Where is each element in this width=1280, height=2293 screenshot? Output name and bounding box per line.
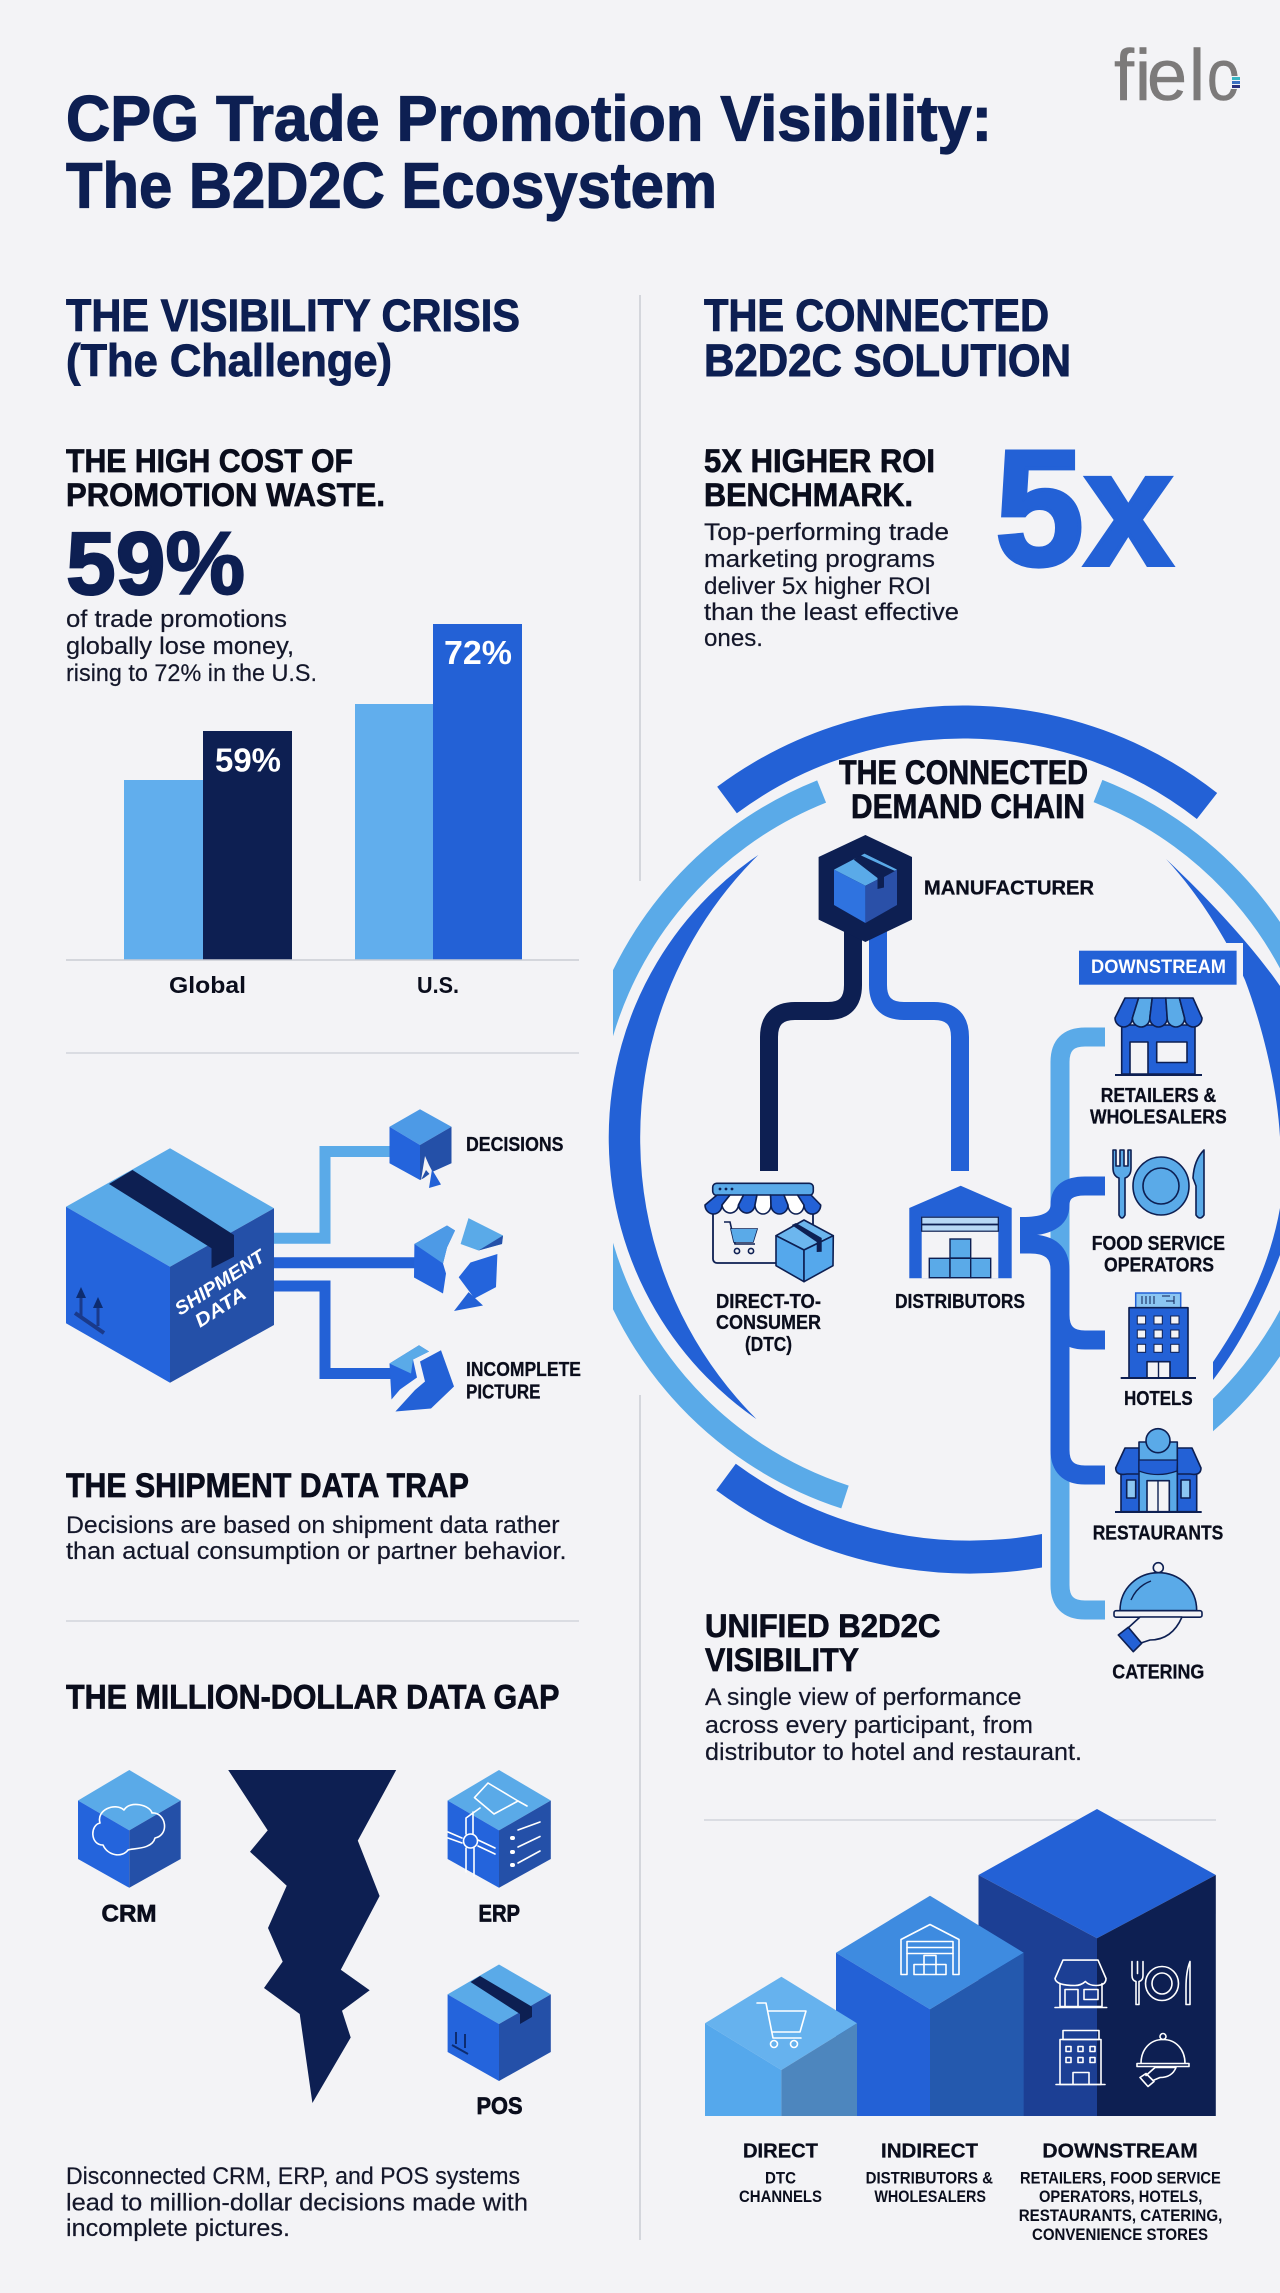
icon: direct-to-consumer store bbox=[705, 1183, 833, 1282]
label: indirect bbox=[866, 2140, 993, 2206]
description: ROI: Top-performing trade bbox=[704, 519, 949, 546]
panel: unified visibility bbox=[705, 1608, 1082, 1766]
icon: shipment box bbox=[66, 1148, 274, 1383]
icon: crack bbox=[228, 1770, 396, 2103]
heading: the connected solution bbox=[704, 290, 1071, 386]
description: ROI: marketing programs bbox=[704, 546, 935, 573]
stat description: rising to 72% in the U.S. bbox=[66, 660, 317, 687]
icon: catering cloche bbox=[1114, 1563, 1202, 1652]
label: direct: CHANNELS bbox=[739, 2188, 822, 2206]
label: incomplete picture: PICTURE bbox=[466, 1380, 540, 1403]
chart: stepped channels bbox=[705, 1809, 1222, 2244]
heading: shipment data trap: THE SHIPMENT DATA TRAP bbox=[66, 1467, 469, 1505]
big stat 59%: 59% bbox=[66, 513, 245, 613]
description: unified visibility: A single view of performance bbox=[705, 1684, 1022, 1711]
icon: ERP cube bbox=[448, 1770, 551, 1888]
description: ROI: ones. bbox=[704, 625, 763, 652]
label: indirect: DISTRIBUTORS & bbox=[866, 2169, 993, 2187]
label: manufacturer: MANUFACTURER bbox=[924, 876, 1094, 900]
heading: promotion waste bbox=[66, 443, 385, 513]
label: indirect: INDIRECT bbox=[881, 2140, 978, 2162]
step: downstream bbox=[978, 1809, 1216, 2116]
heading: ROI benchmark: BENCHMARK. bbox=[704, 477, 913, 513]
label: retailers and wholesalers: RETAILERS & bbox=[1101, 1084, 1216, 1107]
bar chart: Global bbox=[169, 972, 246, 998]
description: unified visibility: distributor to hotel and restaurant. bbox=[705, 1739, 1082, 1766]
connector: manufacturer to distributors bbox=[878, 930, 960, 1171]
label: hotels: HOTELS bbox=[1124, 1387, 1193, 1410]
panel: shipment data trap bbox=[66, 1109, 581, 1565]
heading: the connected solution: THE CONNECTED bbox=[704, 290, 1049, 341]
label: downstream bbox=[1019, 2140, 1222, 2244]
panel: million-dollar data gap bbox=[66, 1678, 560, 2242]
label: direct-to-consumer: DIRECT-TO- bbox=[716, 1290, 821, 1313]
bracket: downstream connectors bbox=[1020, 1037, 1105, 1610]
label: direct bbox=[739, 2140, 822, 2206]
description: data gap: lead to million-dollar decisions made with bbox=[66, 2190, 528, 2216]
heading: the connected solution: B2D2C SOLUTION bbox=[704, 335, 1071, 386]
label: downstream: RESTAURANTS, CATERING, bbox=[1019, 2207, 1222, 2225]
icon: shipment box: DATA bbox=[191, 1284, 251, 1332]
description: unified visibility: across every participant, from bbox=[705, 1712, 1033, 1739]
heading: promotion waste: THE HIGH COST OF bbox=[66, 443, 353, 479]
logo: fielo: fiel bbox=[1114, 36, 1205, 116]
heading: unified visibility: UNIFIED B2D2C bbox=[705, 1608, 940, 1644]
icon: restaurant bbox=[1115, 1429, 1202, 1512]
bar chart bbox=[66, 624, 579, 998]
icon: cracked cube bbox=[390, 1109, 452, 1188]
icon: CRM cube bbox=[78, 1770, 181, 1888]
connector: manufacturer to DTC bbox=[769, 930, 853, 1171]
heading: the visibility crisis: (The Challenge) bbox=[66, 335, 392, 386]
heading: data gap: THE MILLION-DOLLAR DATA GAP bbox=[66, 1678, 560, 1716]
label: ERP: ERP bbox=[478, 1900, 520, 1928]
icon: shattered cube bbox=[414, 1218, 503, 1311]
connector arrows bbox=[274, 1152, 418, 1374]
step: indirect bbox=[836, 1896, 1024, 2116]
logo: fielo: o bbox=[1207, 36, 1240, 116]
description: ROI: deliver 5x higher ROI bbox=[704, 573, 931, 600]
stat description: globally lose money, bbox=[66, 633, 294, 660]
label: downstream: CONVENIENCE STORES bbox=[1032, 2226, 1208, 2244]
heading: connected demand chain: DEMAND CHAIN bbox=[851, 788, 1085, 826]
label: incomplete picture: INCOMPLETE bbox=[466, 1358, 581, 1381]
panel: high cost of promotion waste bbox=[66, 443, 579, 998]
icon: retailers store bbox=[1115, 998, 1202, 1075]
badge: downstream bbox=[1074, 943, 1243, 990]
label: retailers and wholesalers: WHOLESALERS bbox=[1090, 1106, 1227, 1128]
stat description bbox=[66, 606, 317, 687]
title: The B2D2C Ecosystem bbox=[66, 150, 717, 222]
label: incomplete picture bbox=[466, 1358, 581, 1403]
badge: downstream: DOWNSTREAM bbox=[1091, 957, 1226, 978]
ring arcs bbox=[591, 722, 1280, 1557]
bar chart: 59% bbox=[215, 742, 281, 778]
title bbox=[66, 82, 992, 222]
label: direct-to-consumer: CONSUMER bbox=[716, 1311, 821, 1334]
label: indirect: WHOLESALERS bbox=[874, 2188, 986, 2206]
label: food service operators bbox=[1092, 1232, 1225, 1277]
label: food service operators: FOOD SERVICE bbox=[1092, 1232, 1225, 1255]
heading: ROI benchmark: 5X HIGHER ROI bbox=[704, 443, 935, 479]
heading: ROI benchmark bbox=[704, 443, 935, 513]
heading: unified visibility bbox=[705, 1608, 940, 1678]
label: catering: CATERING bbox=[1112, 1660, 1204, 1683]
icon: food service plate bbox=[1113, 1150, 1204, 1218]
column divider bbox=[639, 295, 641, 2240]
description: data gap: Disconnected CRM, ERP, and POS systems bbox=[66, 2163, 520, 2190]
icon: POS box bbox=[448, 1964, 551, 2081]
chart: connected demand chain bbox=[591, 722, 1280, 1683]
label: food service operators: OPERATORS bbox=[1104, 1254, 1214, 1277]
icon: manufacturer bbox=[819, 835, 912, 942]
description: data gap: incomplete pictures. bbox=[66, 2215, 290, 2242]
icon: shipment box: SHIPMENT bbox=[171, 1246, 270, 1320]
heading: connected demand chain: THE CONNECTED bbox=[839, 754, 1088, 792]
label: distributors: DISTRIBUTORS bbox=[895, 1290, 1025, 1313]
label: restaurants: RESTAURANTS bbox=[1093, 1521, 1223, 1544]
heading: promotion waste: PROMOTION WASTE. bbox=[66, 477, 385, 513]
label: retailers and wholesalers bbox=[1090, 1084, 1227, 1128]
label: downstream: OPERATORS, HOTELS, bbox=[1039, 2188, 1202, 2206]
heading: the visibility crisis bbox=[66, 290, 520, 386]
label: direct: DIRECT bbox=[743, 2140, 818, 2162]
description: shipment data trap: than actual consumption or partner behavior. bbox=[66, 1538, 566, 1565]
heading: connected demand chain bbox=[839, 754, 1088, 826]
description: ROI bbox=[704, 519, 959, 652]
big stat 5x: 5x bbox=[995, 416, 1173, 600]
icon: broken cube bbox=[390, 1345, 454, 1412]
heading: the visibility crisis: THE VISIBILITY CRISIS bbox=[66, 290, 520, 341]
bar chart: U.S. bbox=[417, 972, 459, 998]
title: CPG Trade Promotion Visibility: bbox=[66, 82, 992, 154]
description: ROI: than the least effective bbox=[704, 599, 959, 626]
icon: distributors warehouse bbox=[909, 1186, 1012, 1278]
icon: hotel bbox=[1121, 1293, 1196, 1378]
label: direct-to-consumer bbox=[716, 1290, 821, 1356]
description: data gap bbox=[66, 2163, 528, 2242]
description: unified visibility bbox=[705, 1684, 1082, 1766]
bar chart: 72% bbox=[444, 634, 512, 671]
label: POS: POS bbox=[476, 2093, 522, 2120]
label: CRM: CRM bbox=[102, 1900, 156, 1928]
step: direct bbox=[705, 1977, 857, 2116]
description: shipment data trap: Decisions are based on shipment data rather bbox=[66, 1512, 560, 1539]
heading: unified visibility: VISIBILITY bbox=[705, 1642, 859, 1678]
label: direct-to-consumer: (DTC) bbox=[745, 1333, 792, 1356]
stat description: of trade promotions bbox=[66, 606, 287, 633]
panel: 5x ROI benchmark bbox=[704, 416, 1173, 652]
description: shipment data trap bbox=[66, 1512, 566, 1565]
label: decisions: DECISIONS bbox=[466, 1133, 564, 1156]
label: downstream: RETAILERS, FOOD SERVICE bbox=[1020, 2169, 1221, 2187]
label: direct: DTC bbox=[765, 2169, 796, 2187]
label: downstream: DOWNSTREAM bbox=[1042, 2140, 1198, 2162]
